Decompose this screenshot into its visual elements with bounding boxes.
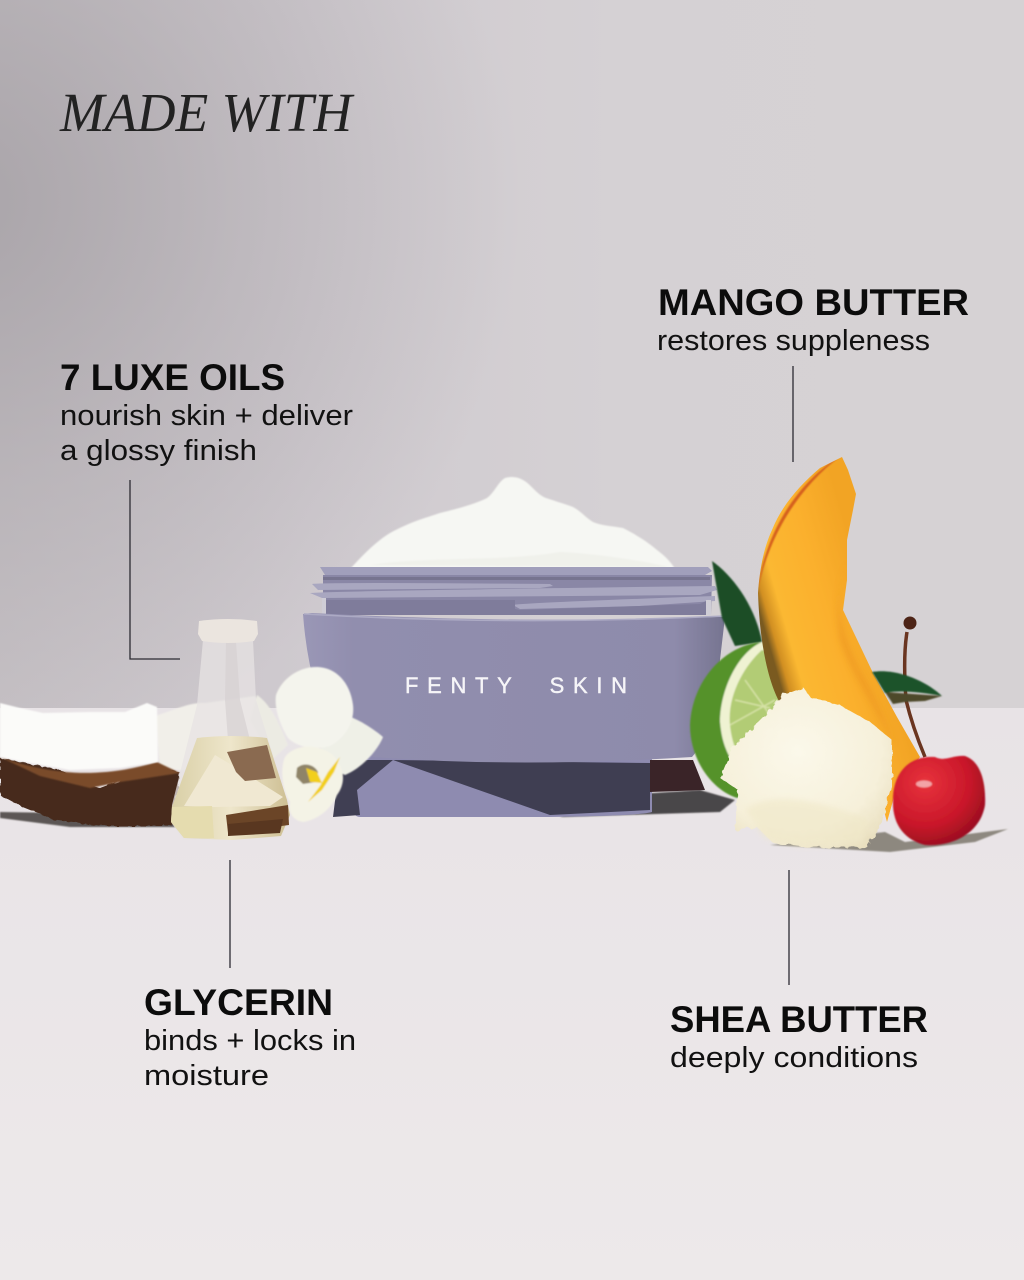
- callout: glycerin: moisture: [144, 1060, 269, 1092]
- coconut: [0, 696, 280, 826]
- title: MADE WITH: [59, 82, 355, 143]
- glycerin flask: [171, 619, 290, 840]
- oil: [171, 736, 290, 840]
- cherry: [893, 756, 985, 845]
- callout: glycerin: GLYCERIN: [144, 982, 333, 1023]
- callout: 7 luxe oils: nourish skin + deliver: [60, 400, 353, 432]
- callout: shea butter: [670, 999, 928, 1074]
- neck glints: [322, 598, 711, 615]
- mango slice: [758, 457, 920, 822]
- callout: glycerin: [144, 982, 356, 1092]
- brand name: FENTY SKIN: [405, 673, 627, 698]
- callout: glycerin: binds + locks in: [144, 1025, 356, 1057]
- orchid flower: [250, 667, 383, 822]
- cream: [350, 477, 675, 569]
- jar neck: [323, 575, 712, 615]
- product jar: [303, 477, 725, 817]
- callout: mango butter: MANGO BUTTER: [658, 282, 969, 323]
- callout: shea butter: deeply conditions: [670, 1042, 918, 1074]
- lime: [690, 642, 790, 798]
- background wall: [0, 0, 1024, 708]
- floor shadows: [0, 790, 1008, 852]
- flask neck rim: [198, 619, 258, 643]
- callout: 7 luxe oils: [60, 357, 353, 467]
- leader line: shea butter: [788, 870, 790, 985]
- leader line: mango butter: [792, 366, 794, 462]
- callout: mango butter: [657, 282, 969, 357]
- leader line: glycerin: [229, 860, 231, 968]
- cherry leaf: [872, 671, 942, 704]
- shea butter: [720, 687, 892, 848]
- callout: 7 luxe oils: a glossy finish: [60, 435, 257, 467]
- lime leaf: [712, 561, 762, 646]
- callout: shea butter: SHEA BUTTER: [670, 999, 928, 1040]
- jar band: [303, 613, 725, 762]
- leader line: 7 luxe oils: [130, 480, 180, 659]
- callout: mango butter: restores suppleness: [657, 325, 930, 357]
- background floor: [0, 708, 1024, 1280]
- base: [340, 755, 652, 817]
- base shadow: [393, 760, 650, 815]
- callout: 7 luxe oils: 7 LUXE OILS: [60, 357, 285, 398]
- cherry stem: [904, 616, 925, 757]
